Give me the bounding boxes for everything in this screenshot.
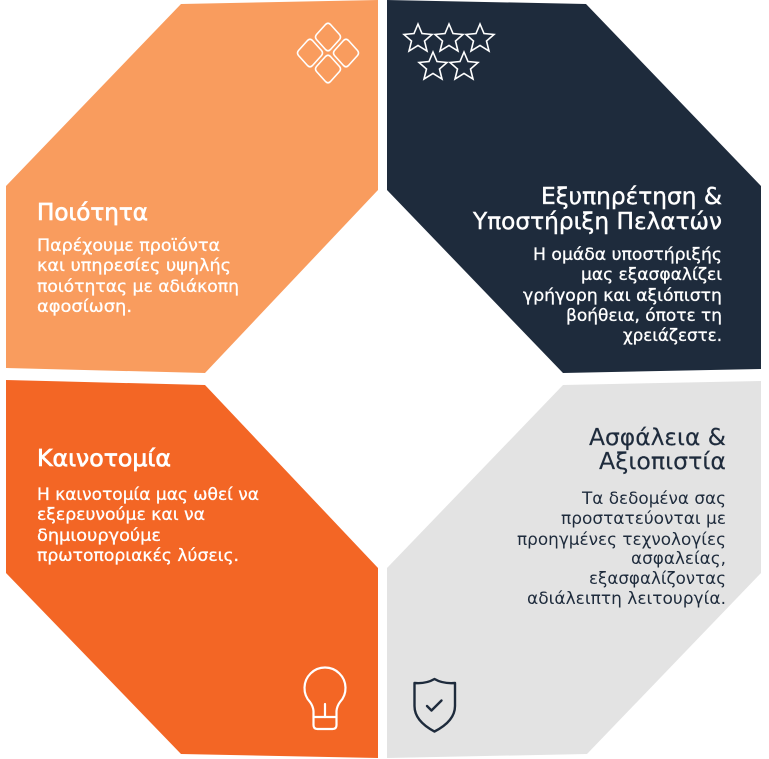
text block: security: ασφαλείας,	[631, 549, 726, 569]
text block: security: εξασφαλίζοντας	[589, 569, 726, 589]
heading: customer support: Εξυπηρέτηση &	[541, 184, 722, 210]
text block: security: προηγμένες τεχνολογίες	[517, 530, 726, 550]
text block: security: προστατεύονται με	[561, 509, 726, 529]
panel: security	[387, 381, 761, 758]
text block: security	[517, 489, 726, 609]
text block: quality: Παρέχουμε προϊόντα	[37, 236, 220, 256]
heading: customer support: Υποστήριξη Πελατών	[472, 209, 722, 235]
heading: security: Ασφάλεια &	[589, 425, 726, 451]
text block: customer support: βοήθεια, όποτε τη	[566, 306, 722, 326]
text block: customer support: Η ομάδα υποστήριξής	[533, 245, 722, 265]
icon: light bulb	[304, 668, 346, 729]
text block: innovation: εξερευνούμε και να	[37, 505, 205, 525]
icon: five stars	[404, 24, 494, 79]
text block: innovation: πρωτοποριακές λύσεις.	[37, 546, 239, 566]
text block: customer support: γρήγορη και αξιόπιστη	[523, 286, 722, 306]
text block: quality: ποιότητας με αδιάκοπη	[37, 277, 239, 297]
text block: customer support: χρειάζεστε.	[623, 326, 722, 346]
text block: security: Τα δεδομένα σας	[581, 489, 726, 509]
text block: quality: αφοσίωση.	[37, 297, 132, 317]
heading: innovation: Καινοτομία	[37, 446, 171, 472]
heading: quality: Ποιότητα	[37, 200, 148, 226]
text block: quality	[37, 236, 239, 317]
panel: quality	[6, 0, 378, 373]
text block: customer support: μας εξασφαλίζει	[581, 265, 722, 285]
text block: quality: και υπηρεσίες υψηλής	[37, 256, 231, 276]
text block: security: αδιάλειπτη λειτουργία.	[527, 589, 726, 609]
text block: innovation	[37, 485, 259, 566]
panel: customer support	[387, 0, 761, 373]
panel: innovation	[6, 380, 378, 758]
text block: innovation: Η καινοτομία μας ωθεί να	[37, 485, 259, 505]
heading: security	[589, 425, 726, 475]
text block: customer support	[523, 245, 722, 346]
icon: shield with check	[414, 679, 455, 732]
text block: innovation: δημιουργούμε	[37, 526, 161, 546]
heading: customer support	[472, 184, 722, 235]
icon: diamonds	[298, 23, 358, 83]
heading: security: Αξιοπιστία	[599, 449, 726, 475]
